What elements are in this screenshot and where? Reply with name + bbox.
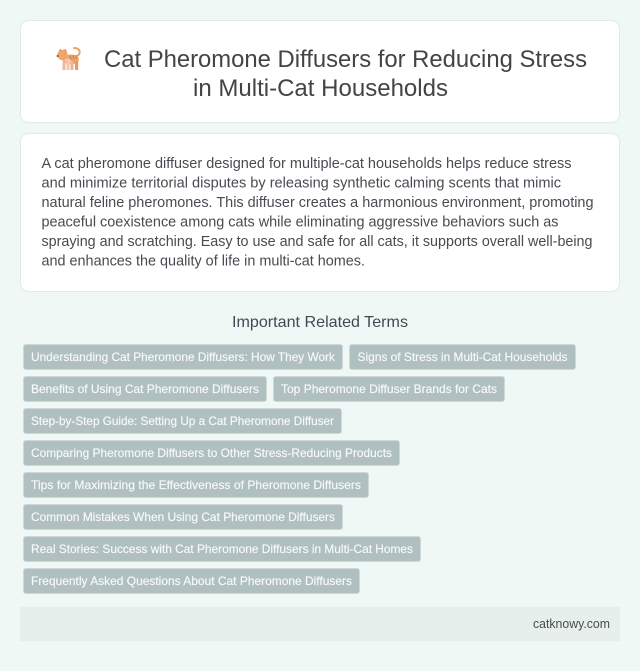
tag (274, 376, 504, 402)
tag: Benefits of Using Cat Pheromone Diffusers (31, 382, 259, 396)
heading: title (104, 46, 587, 102)
heading: title: Cat Pheromone Diffusers for Reducing Stress (104, 46, 587, 73)
tag (24, 408, 342, 434)
heading: title: in Multi-Cat Households (193, 75, 448, 102)
tag: Top Pheromone Diffuser Brands for Cats (281, 382, 497, 396)
footer text: site name: catknowy.com (533, 616, 610, 631)
text block: description: and minimize territorial disputes by releasing synthetic calming scents that mimic (42, 176, 561, 192)
tag (24, 440, 400, 466)
tag: Common Mistakes When Using Cat Pheromone Diffusers (31, 510, 335, 524)
tag: Real Stories: Success with Cat Pheromone Diffusers in Multi-Cat Homes (31, 542, 413, 556)
tag (24, 536, 420, 562)
panel: title card (20, 20, 620, 122)
text block: description: spraying and scratching. Easy to use and safe for all cats, it supports overall well-being (42, 234, 592, 250)
text block: description: natural feline pheromones. This diffuser creates a harmonious environment, promoting (42, 195, 594, 211)
tag: Signs of Stress in Multi-Cat Households (358, 350, 568, 364)
tag list: related terms (24, 344, 576, 594)
tag (24, 376, 266, 402)
tag: Step-by-Step Guide: Setting Up a Cat Pheromone Diffuser (31, 414, 334, 428)
heading: important related terms: Important Related Terms (232, 314, 408, 331)
tag: Frequently Asked Questions About Cat Pheromone Diffusers (31, 574, 352, 588)
text block: description: A cat pheromone diffuser designed for multiple-cat households helps reduce stress (42, 156, 572, 172)
text block: description (42, 156, 594, 270)
tag (24, 472, 368, 498)
footer (20, 607, 620, 641)
tag (24, 344, 342, 370)
tag (24, 504, 342, 530)
icon: cat (57, 48, 80, 70)
tag: Understanding Cat Pheromone Diffusers: How They Work (31, 350, 336, 364)
text block: description: peaceful coexistence among cats while eliminating aggressive behaviors such as (42, 214, 558, 230)
text block: description: and enhances the quality of life in multi-cat homes. (42, 254, 365, 270)
tag (24, 568, 360, 594)
tag: Comparing Pheromone Diffusers to Other Stress-Reducing Products (31, 446, 392, 460)
panel: description (20, 134, 620, 292)
tag: Tips for Maximizing the Effectiveness of Pheromone Diffusers (31, 478, 361, 492)
tag (350, 344, 576, 370)
